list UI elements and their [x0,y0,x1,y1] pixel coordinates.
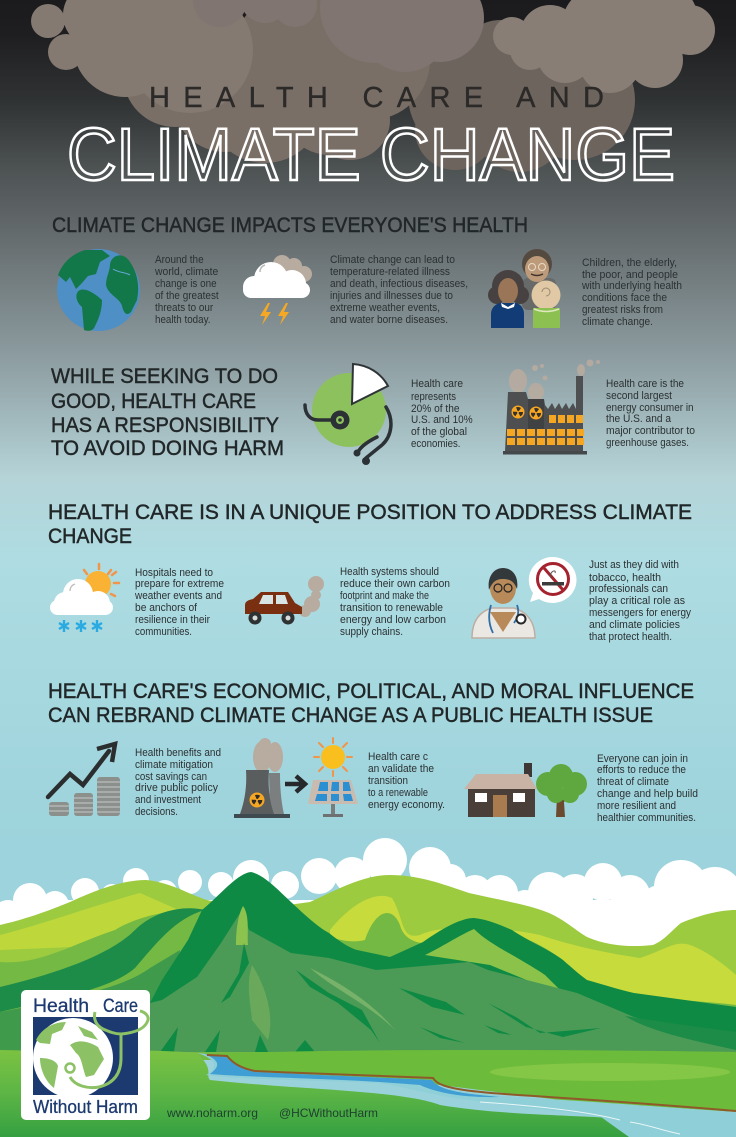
river [197,1053,736,1137]
right cloud [493,0,715,93]
text: just as they did with tobacco: play a critical role as [589,595,685,607]
text: second largest energy consumer: second largest [606,390,672,402]
text: health care represents [411,378,473,450]
mountain light streak [236,906,248,945]
upper field [205,1050,736,1112]
nuclear plant [234,738,290,818]
text: health benefits: decisions. [135,806,178,818]
text: second largest energy consumer: major contributor to [606,425,695,437]
text: health benefits: cost savings can [135,771,207,783]
text: validate the transition: an validate the [368,763,434,775]
text: validate the transition: energy economy. [368,799,445,811]
text: climate change can lead: and death, infectious diseases, [330,278,468,290]
text: validate the transition: transition [368,775,408,787]
text: just as they did with tobacco [589,559,691,643]
storm clouds [31,0,715,172]
text: hospitals need to prepare: be anchors of [135,602,198,614]
left dark ridge [0,908,205,1012]
text: health benefits: Health benefits and [135,747,221,759]
icon: house and tree [464,763,587,817]
text: second largest energy consumer [606,378,695,449]
text: just as they did with tobacco: messengers for energy [589,607,691,619]
light patch on right peak [425,929,575,1000]
heading: unique position: HEALTH CARE IS IN A UNIQUE POSITION TO ADDRESS CLIMATE [48,501,692,524]
back cloud [408,20,635,172]
text: hospitals need to prepare: Hospitals need to [135,567,213,579]
mid cloud [123,0,430,163]
footer twitter handle: @HCWithoutHarm [279,1106,378,1120]
text: children the elderly: greatest risks from [582,304,663,316]
text: health care represents: of the global [411,426,467,438]
text: health care represents: economies. [411,438,460,450]
text: health care represents: 20% of the [411,403,460,415]
heading: while seeking to do good [51,365,284,460]
solar panel [308,780,358,817]
text: hospitals need to prepare: prepare for extreme [135,578,224,590]
text: around the world: world, climate [154,266,218,278]
arrow [285,776,305,792]
icon: doctor with no-smoking bubble [472,557,577,638]
text: health benefits [135,747,221,818]
icon: factory [503,360,600,454]
text: hospitals need to prepare: communities. [135,626,192,638]
text: climate change can lead: and water borne diseases. [330,314,448,326]
text: just as they did with tobacco: tobacco, health [589,572,661,584]
text: just as they did with tobacco: Just as they did with [589,559,679,571]
text: health care represents: Health care [411,378,463,390]
text: just as they did with tobacco: and climate policies [589,619,680,631]
no smoking sign [538,564,568,594]
speech bubble [529,557,577,603]
man [522,249,556,310]
logo: Health Care Without Harm: Care [103,996,138,1017]
baby [532,280,560,328]
text: second largest energy consumer: the U.S. and a [606,413,672,425]
heading: while seeking to do good: WHILE SEEKING TO DO [51,365,278,388]
heading: while seeking to do good: GOOD, HEALTH CARE [51,390,256,413]
yellow ridges [330,896,736,1050]
heading: unique position: CHANGE [48,525,132,548]
far-right shadow [625,1016,736,1050]
logo globe [33,1018,113,1098]
footer website: www.noharm.org [166,1106,258,1120]
text: everyone can join: efforts to reduce the [597,764,686,776]
heading: economic political moral influence [48,680,694,727]
text: children the elderly: climate change. [582,316,653,328]
heading: economic political moral influence: CAN REBRAND CLIMATE CHANGE AS A PUBLIC HEALTH ISSUE [48,704,653,727]
icon: globe [57,249,140,331]
text: health care represents: represents [411,391,456,403]
icon: people [488,249,560,328]
text: children the elderly: Children, the elderly, [582,257,677,269]
text: around the world: Around the [155,254,204,266]
text: everyone can join: change and help build [597,788,698,800]
text: around the world: health today. [155,314,210,326]
text: health systems should [340,566,450,638]
text: health benefits: and investment [135,794,201,806]
yellow-green back hills [0,875,736,1060]
text: health benefits: climate mitigation [135,759,213,771]
left slope [0,950,180,1052]
heading: while seeking to do good: TO AVOID DOING HARM [51,437,284,460]
text: hospitals need to prepare: resilience in their [135,614,210,626]
icon: nuclear plant to solar transition [234,738,358,818]
text: everyone can join [597,753,698,824]
text: children the elderly: with underlying health [581,280,682,292]
text: just as they did with tobacco: that protect health. [589,631,672,643]
text: climate change can lead: extreme weather events, [330,302,440,314]
text: second largest energy consumer: greenhouse gases. [606,437,689,449]
icon: car with exhaust [245,576,324,624]
text: around the world: of the greatest [155,290,219,302]
text: around the world: threats to our [155,302,213,314]
heading: economic political moral influence: HEALTH CARE'S ECONOMIC, POLITICAL, AND MORAL INFLUENCE [48,680,694,703]
lower field [0,1050,640,1137]
mountain body [150,910,736,1052]
icon: storm cloud [243,255,312,325]
text: validate the transition: to a renewable [368,787,428,799]
text: health benefits: drive public policy [135,782,218,794]
text: children the elderly [581,257,682,328]
mid green hills [0,911,736,1060]
text: health care represents: U.S. and 10% [411,414,473,426]
text: climate change can lead: injuries and illnesses due to [330,290,453,302]
doctor [472,568,535,638]
heading: while seeking to do good: HAS A RESPONSIBILITY [51,414,279,437]
text: everyone can join: threat of climate [597,776,669,788]
icon: pie chart with stethoscope [305,364,391,465]
sun [314,738,352,776]
landscape scene [0,838,736,1137]
logo: Health Care Without Harm: Without Harm [33,1097,138,1117]
top cloud [193,0,484,72]
text: second largest energy consumer: Health care is the [606,378,684,390]
text: validate the transition: Health care c [368,751,428,763]
text: health systems should: footprint and make the [340,590,429,602]
text: second largest energy consumer: energy consumer in [606,402,694,414]
text: climate change can lead: Climate change can lead to [330,254,455,266]
left cloud [31,0,253,113]
text: hospitals need to prepare: weather events and [134,590,222,602]
text: around the world: change is one [155,278,217,290]
logo: Health Care Without Harm [21,990,150,1120]
title line 2: CLIMATE CHANGE [67,113,675,196]
main mountain dark top and ridge [150,872,736,1052]
text: hospitals need to prepare [134,567,224,638]
text: everyone can join: more resilient and [597,800,676,812]
text: climate change can lead [330,254,468,326]
text: around the world [154,254,219,326]
woman [488,270,529,328]
text: children the elderly: conditions face the [582,292,667,304]
title line 1: HEALTH CARE AND [149,82,604,114]
text: climate change can lead: temperature-related illness [330,266,450,278]
logo stethoscope [70,1011,148,1088]
icon: sun, cloud and snow [50,564,119,632]
text: just as they did with tobacco: professionals can [589,583,668,595]
text: health systems should: reduce their own carbon [340,578,450,590]
text: children the elderly: the poor, and people [582,269,678,281]
text: health systems should: supply chains. [340,626,403,638]
text: everyone can join: Everyone can join in [597,753,688,765]
icon: rising chart and coins [48,744,120,816]
dark streaks [160,943,601,1052]
logo text: Health [33,996,89,1017]
text: validate the transition [368,751,445,811]
text: health systems should: Health systems should [340,566,439,578]
white clouds [0,838,736,965]
heading: climate change impacts: CLIMATE CHANGE IMPACTS EVERYONE'S HEALTH [52,214,528,237]
text: health systems should: transition to renewable [340,602,443,614]
heading: unique position [48,501,692,548]
text: everyone can join: healthier communities. [597,812,696,824]
text: health systems should: energy and low carbon [340,614,446,626]
